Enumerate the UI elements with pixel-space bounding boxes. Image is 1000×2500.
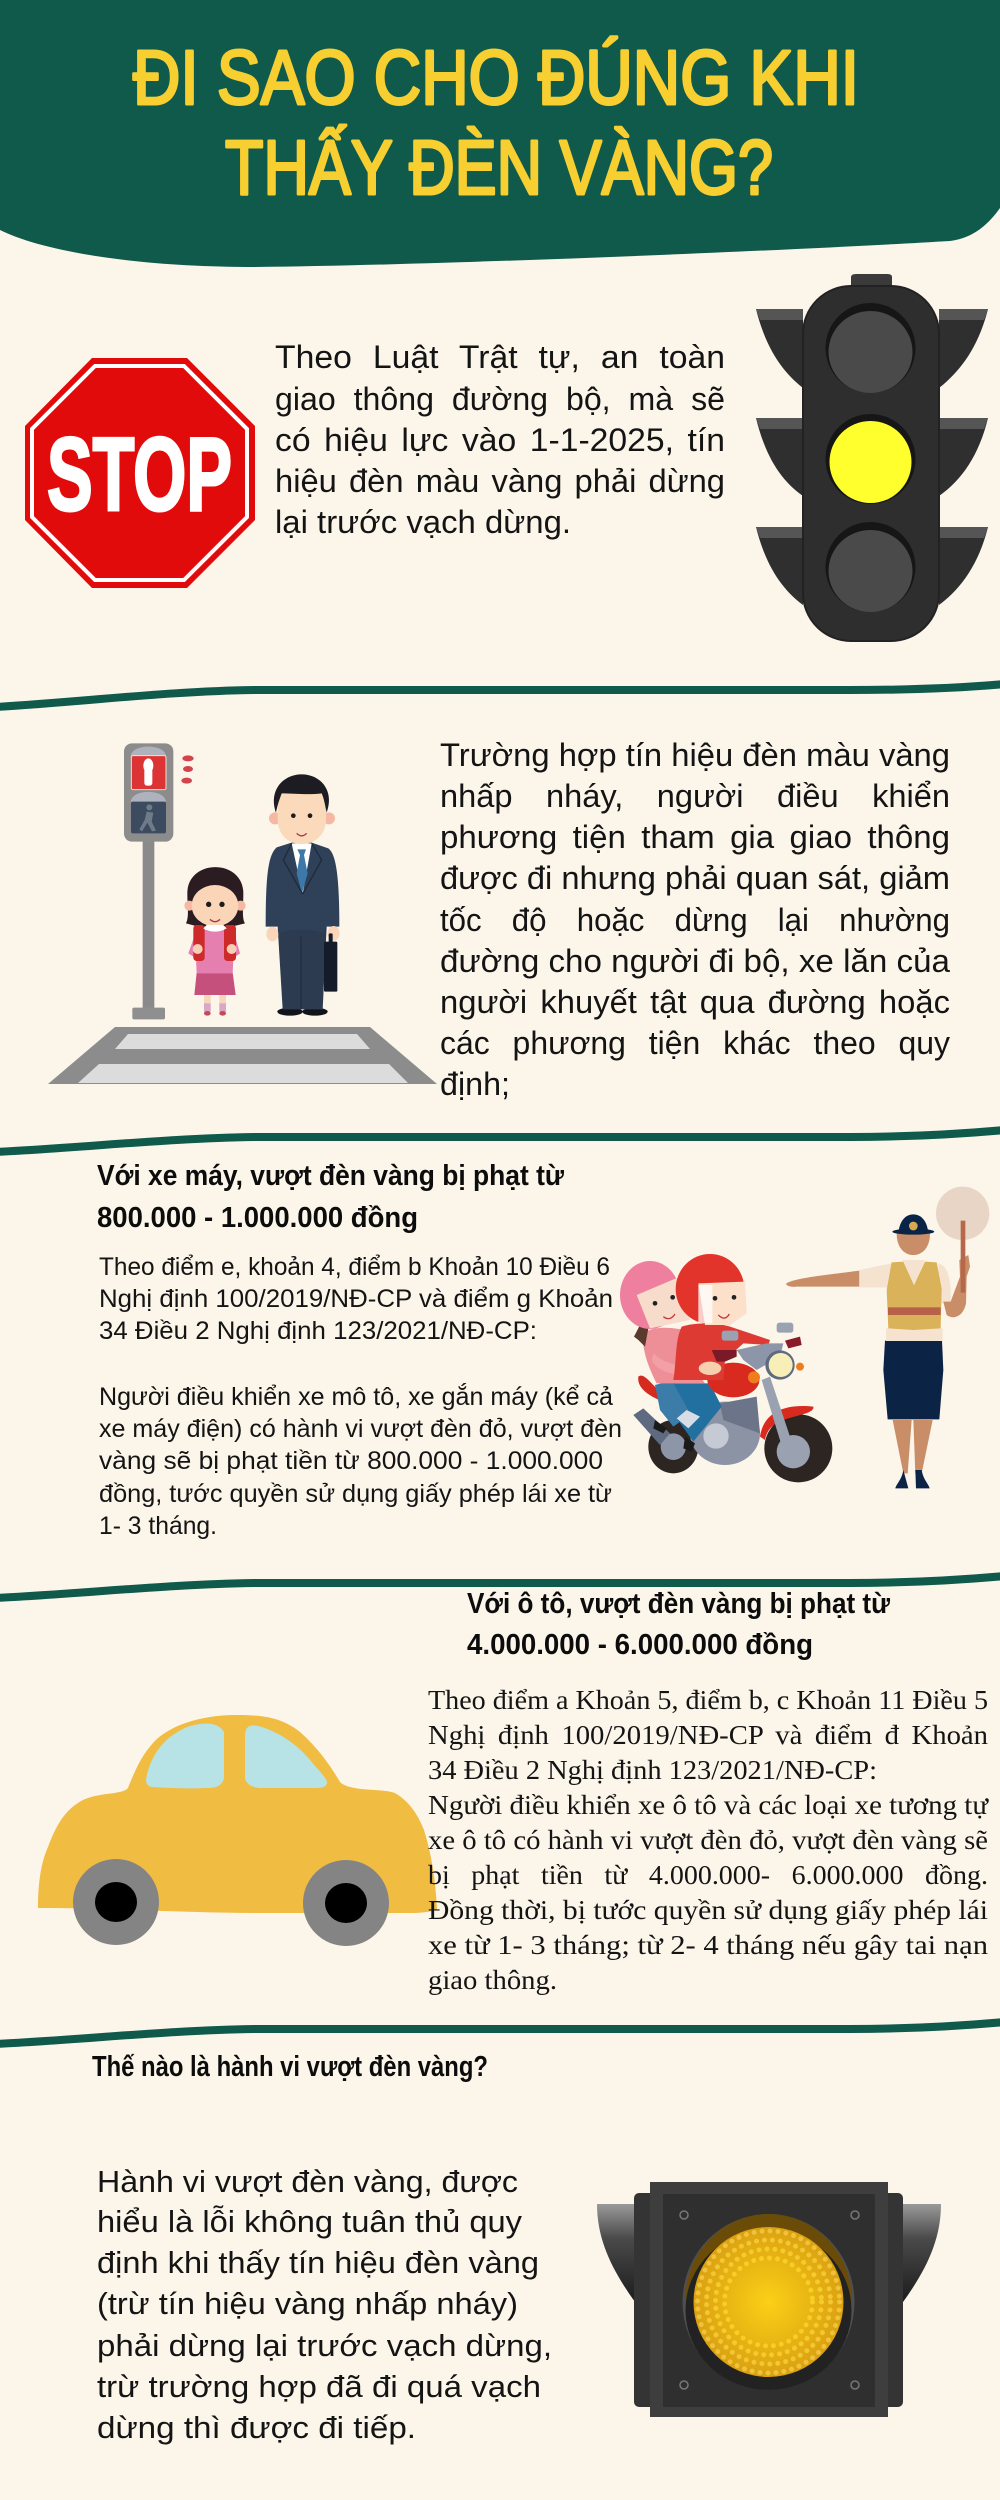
text block: car rule: xe từ 1- 3 tháng; từ 2- 4 tháng nếu gây tai nạn [428, 1930, 989, 1960]
icon: traffic light [756, 274, 988, 641]
text block: new law: có hiệu lực vào 1-1-2025, tín [275, 422, 725, 458]
text block: flashing yellow: người khuyết tật qua đường hoặc [440, 984, 950, 1020]
illustration: yellow car [38, 1715, 437, 1946]
text block: car rule: giao thông. [428, 1965, 557, 1995]
title: THẤY ĐÈN VÀNG? [225, 123, 773, 211]
text block: car rule: xe ô tô có hành vi vượt đèn đỏ, vượt đèn vàng sẽ [428, 1825, 988, 1855]
text block: motorbike rule [99, 1253, 622, 1540]
illustration: riders on motorbike [620, 1254, 832, 1482]
heading: definition: Thế nào là hành vi vượt đèn vàng? [92, 2051, 488, 2083]
illustration: traffic officer [786, 1187, 989, 1488]
text block: definition: hiểu là lỗi không tuân thủ quy [97, 2204, 523, 2239]
text block: new law: hiệu đèn màu vàng phải dừng [275, 463, 725, 499]
pedestrian signal [124, 743, 194, 1019]
text block: flashing yellow: Trường hợp tín hiệu đèn màu vàng [440, 737, 950, 773]
text block: car rule: Đồng thời, bị tước quyền sử dụng giấy phép lái [428, 1895, 988, 1925]
text block: definition: Hành vi vượt đèn vàng, được [97, 2164, 518, 2199]
text block: motorbike rule: đồng, tước quyền sử dụng giấy phép lái xe từ [99, 1480, 612, 1508]
illustration: pedestrians at crossing [48, 743, 437, 1084]
text block: flashing yellow: nhấp nháy, người điều khiển [440, 778, 950, 814]
text block: new law [275, 339, 725, 540]
text block: flashing yellow: phương tiện tham gia giao thông [440, 819, 950, 855]
man with briefcase [266, 774, 340, 1016]
text block: new law: giao thông đường bộ, mà sẽ [275, 381, 725, 417]
text block: car rule: Nghị định 100/2019/NĐ-CP và điểm đ Khoản [428, 1720, 989, 1750]
text block: motorbike rule: Người điều khiển xe mô tô, xe gắn máy (kể cả [99, 1382, 613, 1411]
text block: flashing yellow: định; [440, 1066, 510, 1102]
heading: motorbike fine: Với xe máy, vượt đèn vàng bị phạt từ [97, 1160, 564, 1192]
heading: car fine [467, 1588, 890, 1661]
text block: motorbike rule: vàng sẽ bị phạt tiền từ 800.000 - 1.000.000 [99, 1447, 603, 1475]
text block: new law: Theo Luật Trật tự, an toàn [275, 339, 725, 375]
text block: car rule: Theo điểm a Khoản 5, điểm b, c Khoản 11 Điều 5 [428, 1685, 988, 1715]
text block: definition: định khi thấy tín hiệu đèn vàng [97, 2245, 539, 2280]
title [133, 35, 859, 211]
title: ĐI SAO CHO ĐÚNG KHI [133, 35, 859, 121]
text block: flashing yellow: các phương tiện khác theo quy [440, 1025, 950, 1061]
heading: car fine: Với ô tô, vượt đèn vàng bị phạt từ [467, 1588, 890, 1620]
text block: flashing yellow: tốc độ hoặc dừng lại nhường [440, 902, 950, 938]
heading: motorbike fine: 800.000 - 1.000.000 đồng [97, 1202, 418, 1234]
divider [0, 1576, 1000, 1598]
text block: motorbike rule: Theo điểm e, khoản 4, điểm b Khoản 10 Điều 6 [99, 1253, 610, 1281]
text block: definition: phải dừng lại trước vạch dừng, [97, 2328, 552, 2363]
text block: definition [97, 2164, 552, 2445]
text block: car rule: Người điều khiển xe ô tô và các loại xe tương tự [428, 1790, 989, 1820]
girl [184, 867, 246, 1016]
text block: flashing yellow: đường cho người đi bộ, xe lăn của [440, 943, 950, 979]
header banner [0, 0, 1000, 267]
text block: definition: (trừ tín hiệu vàng nhấp nháy) [97, 2286, 518, 2321]
icon: stop sign: STOP [47, 417, 232, 533]
text block: motorbike rule: Nghị định 100/2019/NĐ-CP và điểm g Khoản [99, 1285, 613, 1313]
text block: motorbike rule: 34 Điều 2 Nghị định 123/2021/NĐ-CP: [99, 1317, 537, 1345]
divider [0, 2022, 1000, 2044]
text block: definition: trừ trường hợp đã đi quá vạch [97, 2369, 541, 2404]
text block: flashing yellow [440, 737, 950, 1102]
icon: amber signal lamp [597, 2182, 941, 2417]
text block: definition: dừng thì được đi tiếp. [97, 2410, 416, 2445]
text block: car rule: bị phạt tiền từ 4.000.000- 6.000.000 đồng. [428, 1860, 988, 1890]
text block: motorbike rule: xe máy điện) có hành vi vượt đèn đỏ, vượt đèn [99, 1415, 622, 1443]
text block: motorbike rule: 1- 3 tháng. [99, 1512, 217, 1540]
heading: motorbike fine [97, 1160, 564, 1234]
divider [0, 1130, 1000, 1152]
icon: stop sign [25, 358, 255, 588]
text block: car rule: 34 Điều 2 Nghị định 123/2021/NĐ-CP: [428, 1755, 877, 1785]
text block: new law: lại trước vạch dừng. [275, 504, 571, 540]
divider [0, 684, 1000, 707]
crossing [48, 1027, 437, 1084]
heading: car fine: 4.000.000 - 6.000.000 đồng [467, 1629, 813, 1661]
text block: car rule [428, 1685, 989, 1995]
text block: flashing yellow: được đi nhưng phải quan sát, giảm [440, 860, 950, 896]
